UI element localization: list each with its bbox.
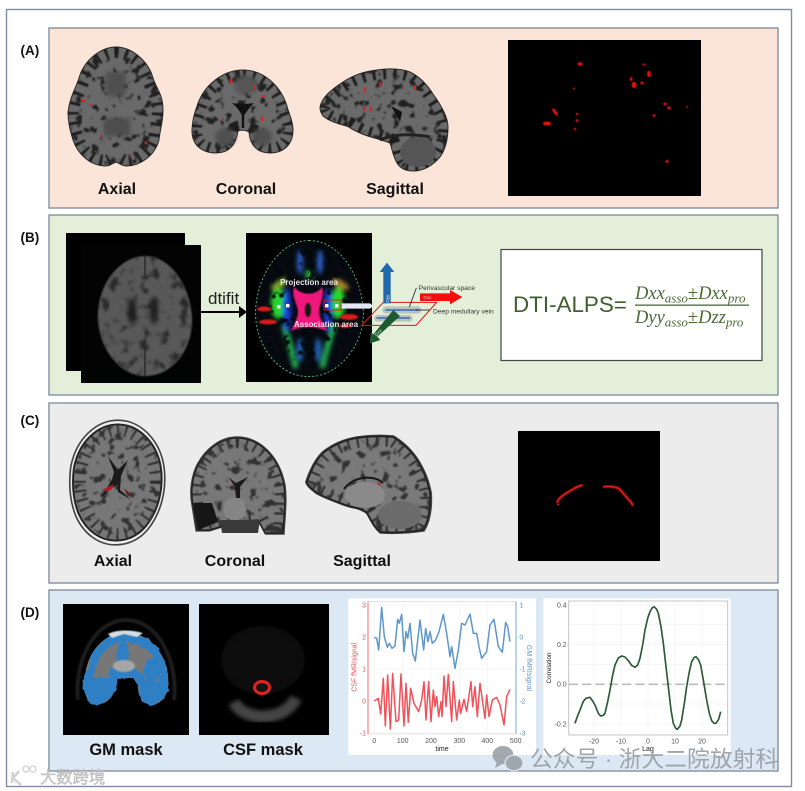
y axis labels: 0.0 [557,682,567,689]
y axis labels: 0.2 [557,642,567,649]
x axis labels: 20 [698,738,706,745]
fraction: denominator: asso [665,314,688,330]
watermark text: 公众号 · 浙大二院放射科 [530,746,778,772]
left axis labels: 2 [362,635,366,642]
left axis labels: -1 [360,730,366,737]
label: Sagittal: Sagittal [366,181,424,198]
brain: coronal [191,437,286,534]
brain: axial with lesions [68,47,163,166]
zero line [569,682,728,687]
y axis labels: 0.4 [557,602,567,609]
label: Axial: Axial [94,553,132,570]
arrow: dtifit [200,306,247,318]
fraction: denominator: pro [725,314,744,330]
heading: B: (B) [20,230,39,245]
watermark: bottom-left logo [12,766,105,787]
label: Coronal: Coronal [216,181,276,198]
panel: C choroid plexus segmentation [20,403,778,583]
diagram: perivascular orientation [342,263,494,343]
DWI image stack [66,233,201,383]
fraction: denominator: ± [688,308,698,328]
label: dtifit: dtifit [208,289,239,308]
label: CSF mask: CSF mask [223,741,304,759]
chart: CSF and GM time series [348,598,536,755]
x axis labels: -10 [616,738,626,745]
left axis labels: 1 [362,666,366,673]
brain: coronal with lesions [192,70,293,153]
CSF mask image [199,604,329,735]
vessels [374,306,421,322]
panel: B DTI-ALPS [20,215,778,395]
icon: WeChat [492,746,523,771]
right axis labels: -1 [519,667,526,674]
x axis labels: 10 [671,738,679,745]
left axis labels: 0 [362,698,366,705]
fraction: numerator: pro [727,290,746,306]
heading: A: (A) [20,43,39,58]
x axis labels: 200 [425,738,437,745]
fraction: denominator: Dzz [698,308,726,328]
formula box [501,250,762,360]
x axis labels: 500 [510,738,522,745]
panel: A structural lesion segmentation [20,28,778,208]
label: Axial: Axial [98,181,136,198]
brain: sagittal with lesions [320,69,448,171]
colour FA map [246,233,372,382]
fraction bar [635,304,749,306]
label: Sagittal: Sagittal [333,553,391,570]
left axis labels: 3 [362,603,366,610]
x axis labels: 400 [482,738,493,745]
axis title: Correlation: Correlation [546,652,553,683]
label: deep medullary vein: Deep medullary vein [433,308,494,315]
fraction: numerator: ± [688,284,698,304]
series: GM signal [374,607,510,668]
right axis labels: 1 [519,603,523,610]
axis title: Lag: Lag [642,746,654,753]
watermark: bottom-left logo: 大数跨境 [40,768,105,787]
x axis labels: 100 [397,738,409,745]
series: correlation [575,607,721,729]
label: perivascular space: Perivascular space [419,285,475,292]
pointer: white bar [342,303,373,309]
arrow: Dzz: Dzz [374,328,383,337]
label: association area: Association area [294,320,359,329]
y axis labels: -0.2 [555,721,567,728]
right axis labels [519,603,526,737]
formula name: DTI-ALPS= [513,292,627,317]
x axis labels: -20 [589,738,599,745]
brain: sagittal [306,435,431,533]
x axis labels [372,738,522,745]
panel: D functional coupling [20,590,778,771]
ventricle mask image [518,431,660,561]
brain: axial with ventricles [70,420,165,545]
x axis labels: 300 [454,738,465,745]
right axis labels: 0 [519,635,523,642]
right axis labels: -3 [519,730,526,737]
axis title: GM signal: GM fMRIsignal [525,645,532,692]
fraction: numerator: Dxx [635,284,665,304]
parallelogram plane [362,302,437,325]
x axis labels: 0 [372,738,376,745]
arrow: Dxx: Dxx [423,295,432,300]
label: perivascular space [409,285,475,307]
arrow: Dxx [420,290,462,304]
label: projection area: Projection area [280,278,338,287]
fraction: numerator: Dxx [698,284,728,304]
heading: C: (C) [20,413,39,428]
axis title: time: time [435,746,449,753]
arrow: Dyy [380,263,394,303]
x axis labels: 0 [646,738,650,745]
series: CSF signal [374,673,510,729]
heading: D: (D) [20,605,39,620]
left axis labels [360,603,366,737]
axis title: CSF signal: CSF fMRIsignal [351,642,358,692]
y axis labels [555,602,567,728]
x axis labels [589,738,706,745]
label: GM mask: GM mask [89,741,163,759]
arrow: Dyy: Dyy [385,294,390,303]
fraction: denominator: Dyy [635,308,665,328]
fraction: numerator: asso [665,290,688,306]
label: Coronal: Coronal [205,553,265,570]
GM mask image [63,604,189,735]
lesion mask image [508,40,701,196]
chart: cross correlation [543,598,731,755]
watermark: WeChat account [492,746,778,772]
arrow: Dzz [370,310,400,343]
right axis labels: -2 [519,698,526,705]
